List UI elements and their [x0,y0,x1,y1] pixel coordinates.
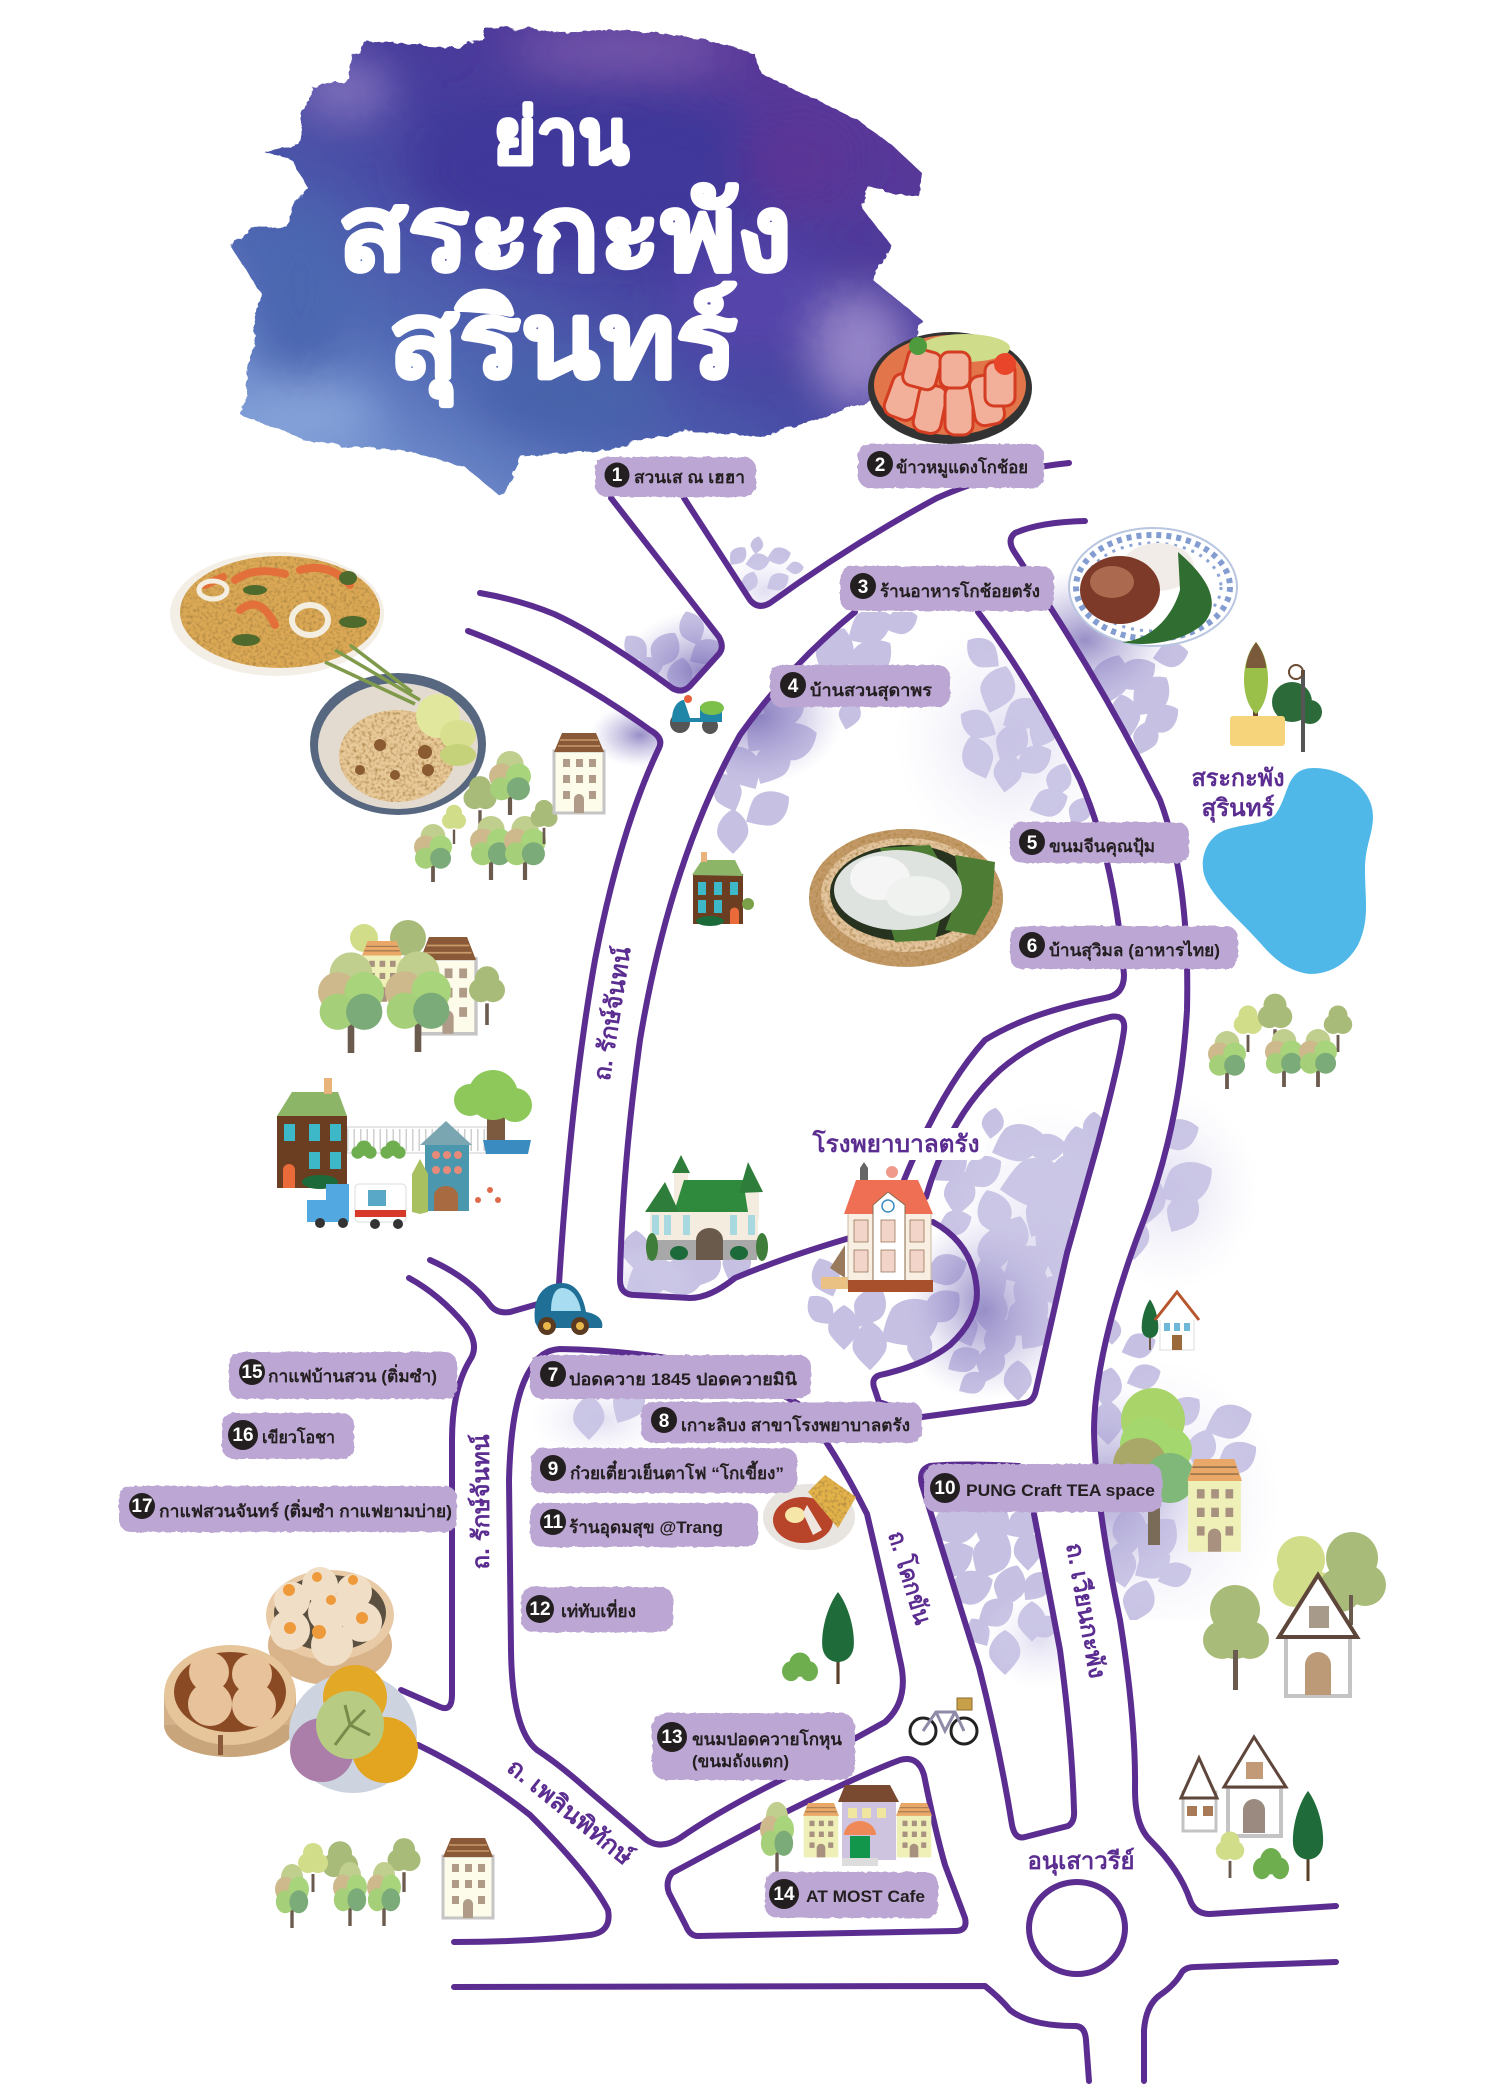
pill 14 [765,1872,938,1918]
hospital name label: โรงพยาบาลตรัง [811,1129,980,1158]
brown house, fence, blue house, park and truck [277,1070,532,1229]
food: yong tau foo plate [763,1475,856,1550]
pill 16 [222,1413,354,1459]
pill 10: PUNG Craft TEA space [966,1481,1155,1500]
pill 9 [531,1448,797,1493]
pill 3: 3 [858,577,868,598]
lake name label: สระกะพัง [1192,765,1284,792]
pill 16: 16 [232,1425,254,1446]
pill 14: 14 [773,1884,795,1905]
pill 6 [1010,926,1238,969]
road labels: ถ. รักษ์จันทน์ [467,1434,495,1570]
title [338,95,792,407]
pill 17: กาแฟสวนจันทร์ (ติ่มซำ กาแฟยามบ่าย) [159,1499,452,1521]
houses and trees group [318,920,505,1053]
lake name label [1192,765,1284,824]
castle [645,1155,768,1261]
road labels: ถ. เวียนกะพัง [1060,1541,1111,1681]
pill 17 [119,1486,457,1532]
pill 8 [641,1402,922,1443]
pill 16: เขียวโอชา [262,1427,335,1447]
title: ย่าน [493,95,629,180]
pill 15 [229,1352,457,1399]
food: khanom jeen basket [809,829,1003,967]
large tree and building by cafe 10 [1113,1388,1242,1552]
trees and building: upper-left cluster [414,733,604,882]
pill 15: กาแฟบ้านสวน (ติ่มซำ) [268,1364,437,1386]
car [535,1283,602,1335]
pill 3: ร้านอาหารโกช้อยตรัง [880,581,1040,601]
pill 4 [770,665,950,707]
pill 4: บ้านสวนสุดาพร [810,681,933,701]
watercolor title blob [220,20,930,500]
trees and white gabled house [1203,1532,1386,1696]
pill 5: 5 [1027,833,1038,854]
bicycle [910,1698,977,1744]
pill 1 [595,457,756,497]
food: shumai steamer back [266,1567,394,1685]
hospital building [821,1162,933,1292]
pill 11: 11 [543,1512,563,1533]
road labels [467,944,1134,1877]
title: สระกะพัง [338,175,792,293]
food: fried rice plate [310,645,486,815]
pill 14: AT MOST Cafe [806,1887,925,1906]
small white house [1142,1292,1199,1350]
lake name label: สุรินทร์ [1202,794,1275,824]
pill 11: ร้านอุดมสุข @Trang [569,1518,723,1538]
tree cluster right of lake [1208,994,1352,1089]
lake [1203,768,1373,974]
scooter [670,695,724,734]
pill 4: 4 [788,676,799,697]
pill 12 [521,1587,673,1632]
food: rice and greens plate [1069,528,1237,646]
pill 9: 9 [548,1459,558,1480]
pill 2: 2 [875,455,885,476]
pill 3 [840,566,1054,611]
pill 7: 7 [548,1365,558,1386]
title: สุรินทร์ [388,282,738,407]
lower right houses and trees [1181,1737,1323,1881]
pill 8: เกาะลิบง สาขาโรงพยาบาลตรัง [681,1415,910,1435]
road labels: ถ. รักษ์จันทน์ [588,944,637,1083]
road labels: อนุเสาวรีย์ [1028,1847,1134,1877]
pill 13: ขนมปอดควายโกหุน [692,1729,842,1750]
pill 8: 8 [659,1411,669,1432]
pill 7 [530,1355,811,1399]
pill 12: เท่ทับเที่ยง [561,1599,636,1621]
pill 15: 15 [241,1362,263,1383]
pill 1: 1 [612,465,623,486]
pill 6: 6 [1027,936,1037,957]
pill 12: 12 [529,1599,551,1620]
food: colourful bao plate [289,1665,418,1793]
pill 13: 13 [661,1727,683,1748]
pill 1: สวนเส ณ เฮฮา [634,468,745,487]
food: shumai steamer front [164,1645,296,1757]
pill 5: ขนมจีนคุณปุ้ม [1049,836,1155,857]
pill 7: ปอดควาย 1845 ปอดควายมินิ [569,1370,797,1389]
pill 9: ก๋วยเตี๋ยวเย็นตาโฟ “โกเขี้ยง” [570,1460,784,1483]
cafe block buildings [760,1785,932,1872]
food: spicy seafood noodles [170,552,384,676]
road labels: ถ. เพลินพิทักษ์ [502,1753,639,1871]
pill 13 [652,1713,855,1780]
food: red pork rice [868,332,1032,444]
small brown house [692,852,754,926]
pill 2: ข้าวหมูแดงโกช้อย [896,457,1028,479]
bottom-left trees and building [275,1838,493,1928]
park bench, tree and lamp [1230,642,1322,752]
road network [401,463,1336,2081]
pill 13: (ขนมถังแตก) [692,1752,789,1771]
pill 10: 10 [934,1478,956,1499]
dark tree and bush [782,1592,854,1684]
lavender leaf background [530,535,1280,1690]
pill 5 [1010,822,1189,863]
pill 10 [924,1464,1162,1512]
road labels: ถ. โคกขัน [882,1527,938,1628]
pill 6: บ้านสุวิมล (อาหารไทย) [1049,940,1220,961]
pill 11 [530,1503,758,1547]
pill 17: 17 [131,1496,153,1517]
pill 2 [858,444,1044,488]
